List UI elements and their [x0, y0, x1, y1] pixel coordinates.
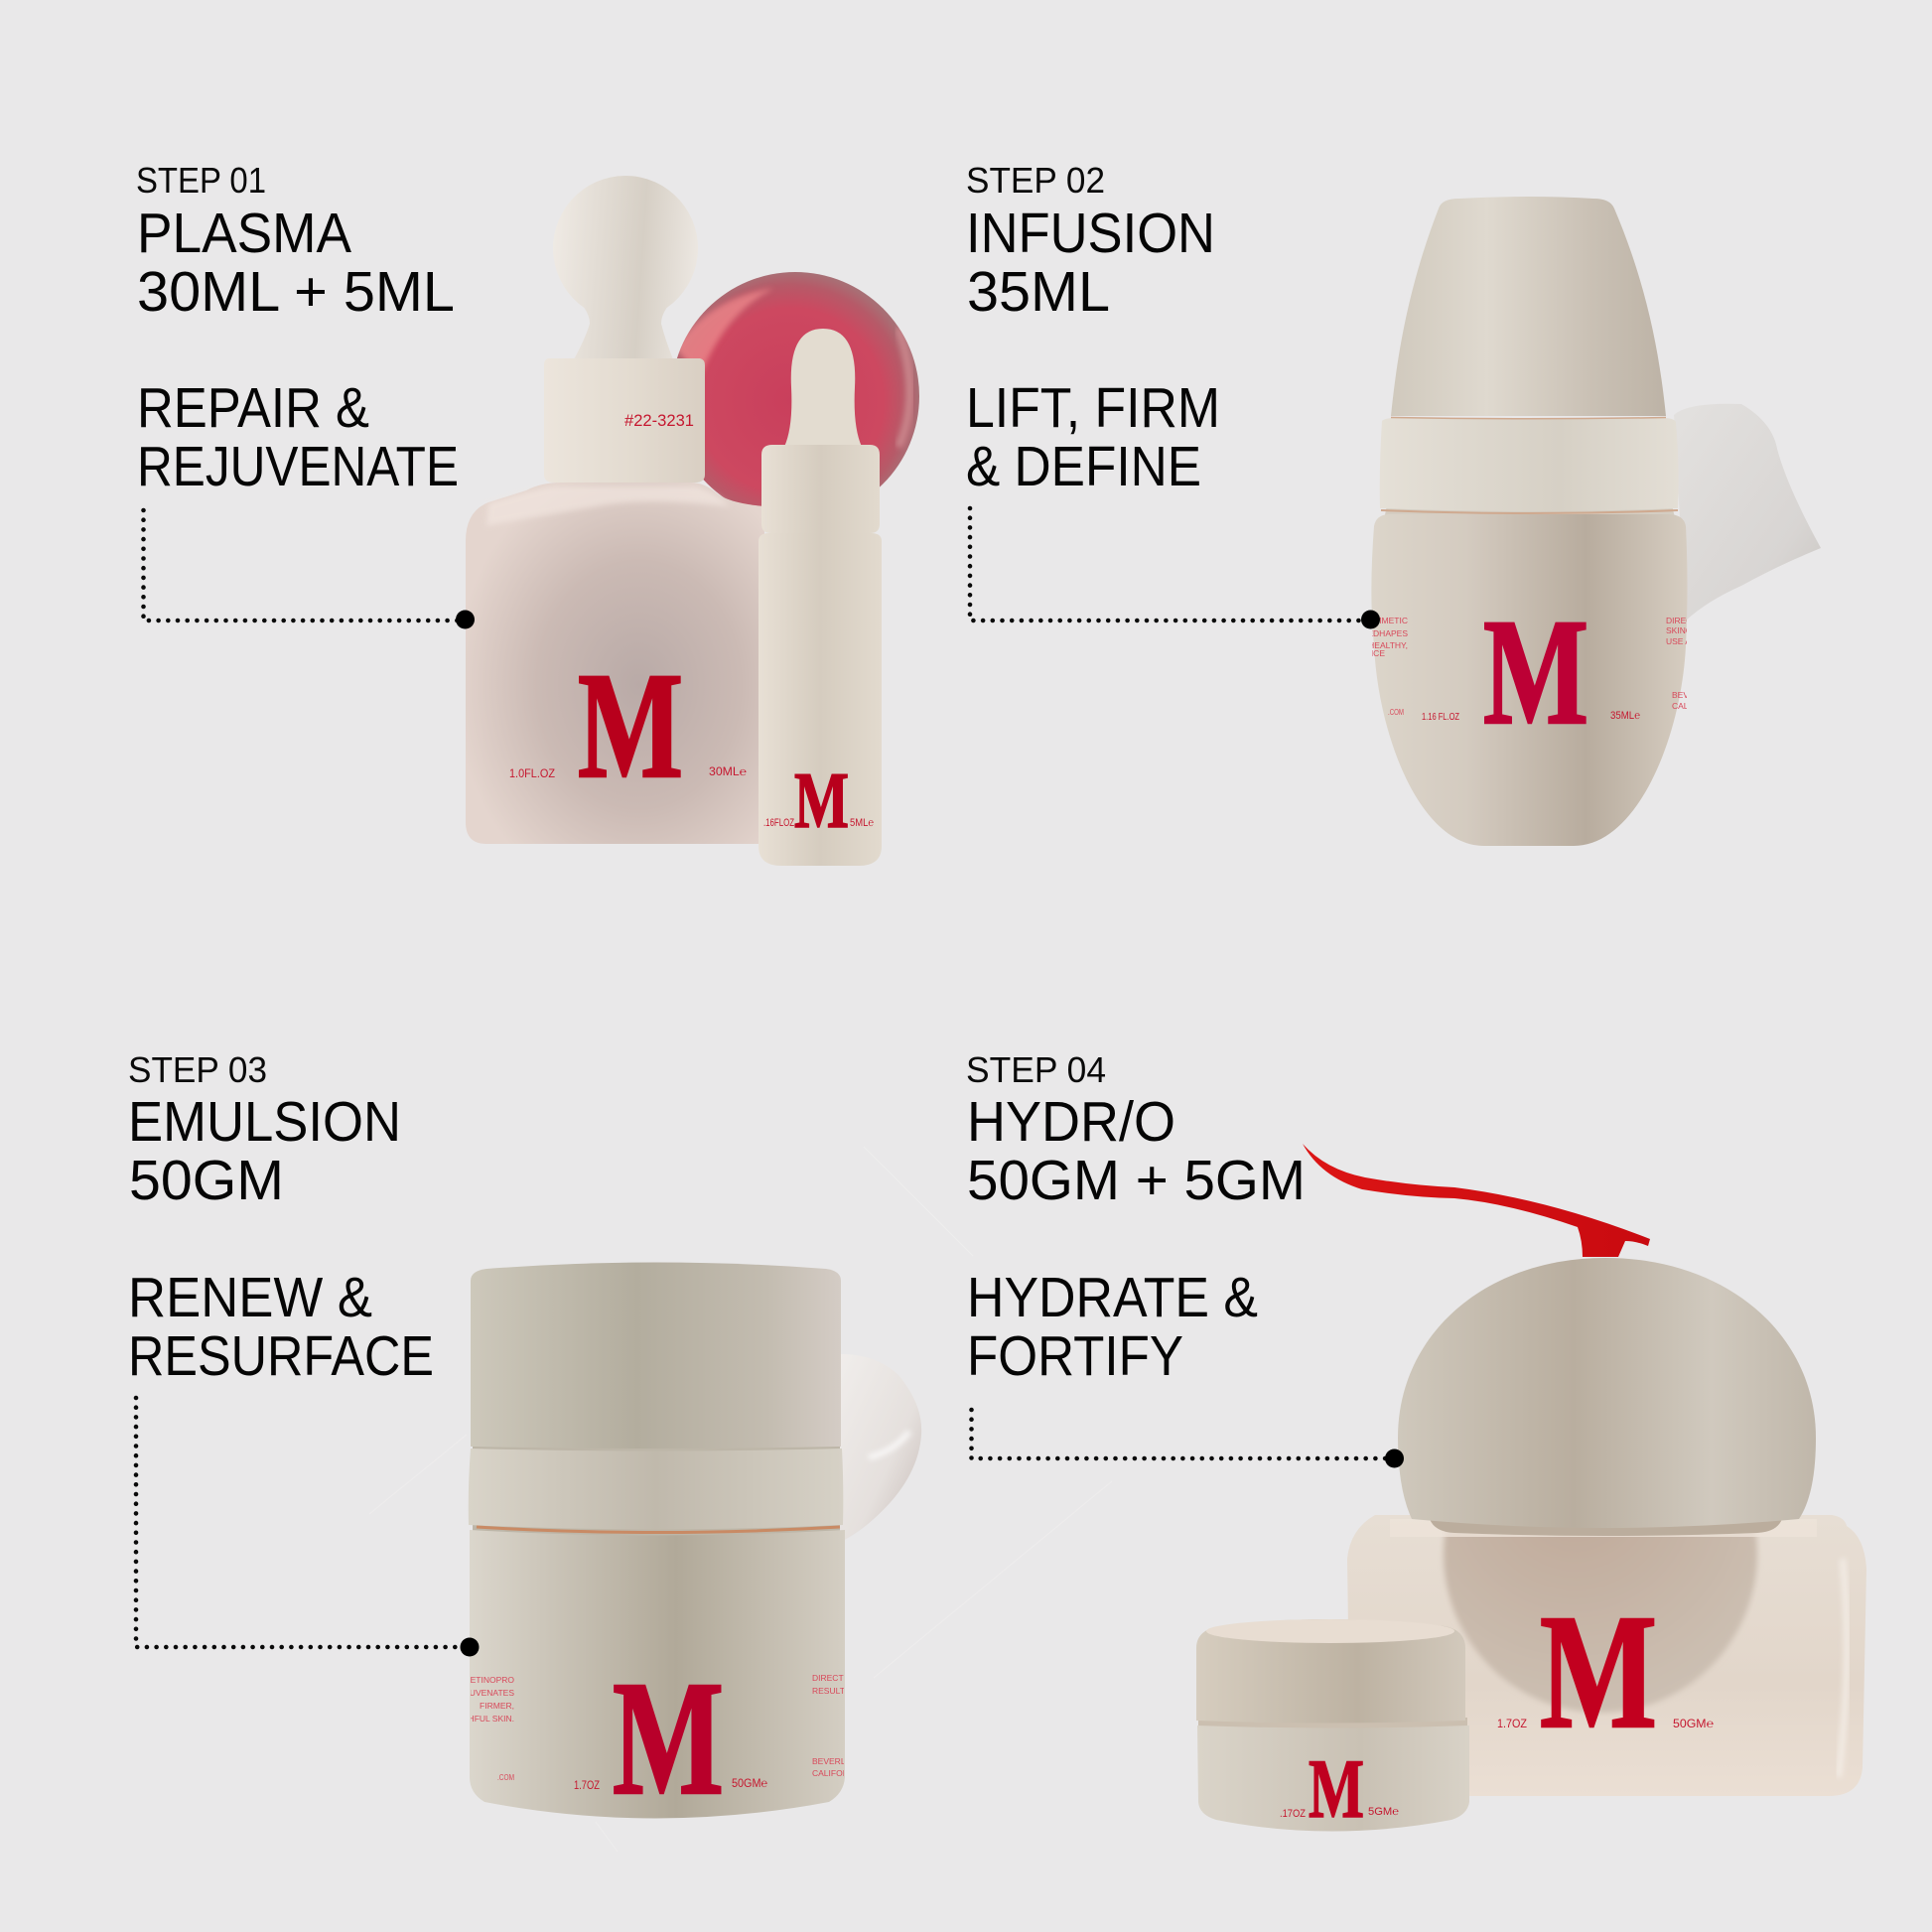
product: small serum bottle: .16FLOZ [763, 817, 794, 829]
heading: step 04: HYDR/O [967, 1090, 1175, 1154]
product: small serum bottle: 5ML℮ [850, 817, 874, 829]
heading: step 04: HYDRATE & [967, 1266, 1258, 1329]
heading: step 01: STEP 01 [136, 160, 266, 201]
product: emulsion jar: FIRMER, [480, 1701, 514, 1711]
heading: step 04 [966, 1049, 1306, 1388]
product: infusion bottle: M [1483, 589, 1588, 757]
heading: step 03: 50GM [129, 1149, 284, 1212]
product: small jar: .17OZ [1280, 1808, 1306, 1820]
heading: step 03: EMULSION [128, 1090, 401, 1154]
product: large serum bottle: M [578, 642, 683, 810]
product: large serum bottle: #22-3231 [624, 411, 694, 430]
panel: step 02 infusion [966, 160, 1821, 846]
heading: step 04: STEP 04 [966, 1049, 1106, 1090]
product: large serum bottle: 1.0FL.OZ [509, 768, 555, 780]
icon: red spatula [1303, 1144, 1650, 1257]
heading: step 01: PLASMA [137, 202, 351, 265]
heading: step 01 [136, 160, 459, 498]
product: infusion bottle: ANCE [1361, 648, 1385, 658]
heading: step 01: REPAIR & [137, 376, 369, 440]
product: small jar [1196, 1619, 1469, 1836]
product: small jar: 5GM℮ [1368, 1806, 1399, 1818]
heading: step 04: FORTIFY [967, 1324, 1183, 1388]
product: small serum bottle [759, 329, 882, 866]
heading: step 01: REJUVENATE [137, 435, 459, 498]
heading: step 03: STEP 03 [128, 1049, 267, 1090]
product: small jar: M [1309, 1742, 1364, 1836]
panel: step 01 plasma [136, 160, 919, 866]
product: infusion bottle: FOR HEALTHY, [1348, 640, 1408, 650]
product: hydro glass base: M [1540, 1581, 1657, 1762]
product: infusion bottle: .COM [1388, 707, 1404, 717]
heading: step 02: INFUSION [966, 202, 1215, 265]
product: hydro glass base: 1.7OZ [1497, 1717, 1527, 1730]
product: infusion bottle: 35ML℮ [1610, 710, 1640, 722]
icon: cream swatch [834, 1354, 921, 1545]
product: emulsion jar: DIRECTIONS [812, 1673, 865, 1683]
product: emulsion jar: YOUTHFUL SKIN. [445, 1714, 514, 1724]
heading: step 02: LIFT, FIRM [966, 376, 1220, 440]
heading: step 02: 35ML [967, 260, 1110, 324]
product: emulsion jar: 50GM℮ [732, 1776, 767, 1790]
product: infusion bottle: REDHAPES [1361, 628, 1408, 638]
heading: step 03: RENEW & [128, 1266, 372, 1329]
product: emulsion jar [469, 1263, 845, 1819]
icon: pink serum swatch [671, 272, 919, 520]
product: hydro glass base [1347, 1395, 1866, 1796]
product: emulsion jar: CALIFORNIA [812, 1768, 863, 1778]
product: emulsion jar: BEVERLY HILLS [812, 1756, 877, 1766]
heading: step 03: RESURFACE [128, 1324, 434, 1388]
connector: dotted leader with end dot [143, 510, 475, 629]
product: infusion bottle: USE AFTER [1666, 636, 1713, 646]
product: emulsion jar: REJUVENATES [454, 1688, 514, 1698]
connector: dotted leader with end dot [136, 1398, 479, 1656]
icon: white cream swatch [1674, 404, 1821, 621]
heading: step 02: & DEFINE [966, 435, 1201, 498]
product: hydro glass base: 50GM℮ [1673, 1717, 1714, 1730]
heading: step 01: 30ML + 5ML [137, 260, 455, 324]
product: infusion bottle: CALIFORNIA [1672, 701, 1723, 711]
product: infusion bottle: SKINCARE [1666, 625, 1710, 635]
product: infusion bottle: ONOMMETIC [1355, 616, 1408, 625]
heading: step 02: STEP 02 [966, 160, 1105, 201]
heading: step 03 [128, 1049, 434, 1388]
product: large serum bottle [466, 176, 764, 844]
product: emulsion jar: WITH RETINOPRO [440, 1675, 514, 1685]
product: infusion bottle: 1.16 FL.OZ [1422, 711, 1459, 723]
panel: step 03 emulsion [128, 1049, 921, 1829]
product: infusion bottle: DIRECTIONS [1666, 616, 1719, 625]
heading: step 04: 50GM + 5GM [967, 1149, 1306, 1212]
product: infusion bottle: BEVERLY HILLS [1672, 690, 1736, 700]
connector: dotted leader with end dot [970, 508, 1380, 629]
product: emulsion jar: RESULTS, LA [812, 1686, 866, 1696]
product: infusion bottle [1371, 197, 1688, 846]
product: large serum bottle: 30ML℮ [709, 766, 747, 778]
product: emulsion jar: 1.7OZ [574, 1778, 600, 1792]
product: hydro dome cap [1398, 1258, 1816, 1536]
product: emulsion jar: .COM [497, 1772, 514, 1782]
connector: dotted leader with end dot [971, 1410, 1404, 1467]
panel: step 04 hydr/o [966, 1049, 1866, 1836]
product: small serum bottle: M [794, 758, 849, 845]
product: emulsion jar: M [613, 1647, 724, 1829]
heading: step 02 [966, 160, 1220, 498]
